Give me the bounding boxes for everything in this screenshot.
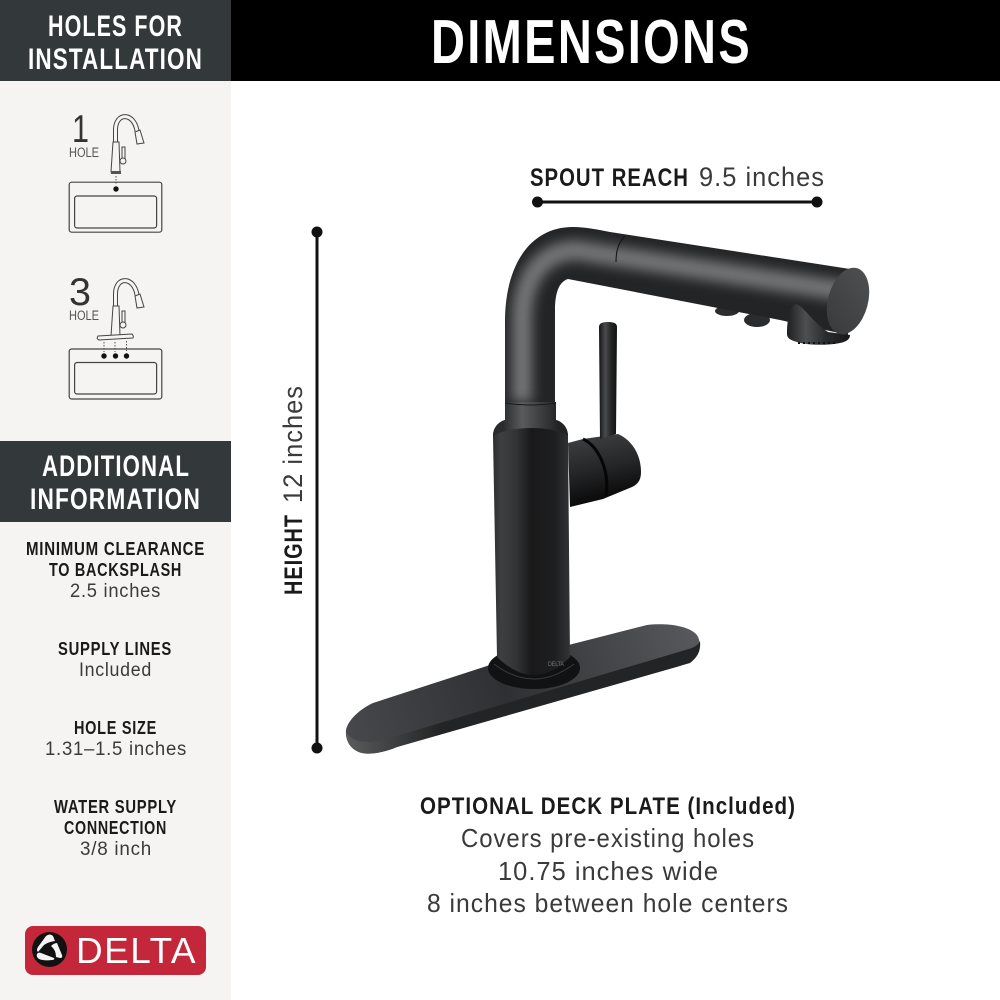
icon: one hole installation [69, 108, 162, 232]
heading: holes for installation: HOLES FOR [48, 10, 183, 43]
heading: additional information: INFORMATION [30, 483, 201, 516]
text block: supply lines: Included [79, 660, 152, 681]
faucet body and collar: DELTA [548, 662, 564, 668]
icon: three hole installation [69, 271, 162, 399]
icon: three hole installation: 3 [69, 271, 91, 314]
text block: hole size: HOLE SIZE [74, 717, 157, 738]
knobs under spout [715, 306, 770, 327]
text block: hole size [45, 717, 187, 760]
text block: optional deck plate [420, 793, 796, 918]
icon: one hole installation: 1 [72, 108, 89, 151]
text block: optional deck plate: Covers pre-existing holes [461, 823, 755, 853]
text block: water supply connection: 3/8 inch [80, 839, 152, 860]
panel: left sidebar background [0, 0, 231, 1000]
spout [505, 227, 850, 402]
text block: optional deck plate: 8 inches between hole centers [427, 888, 789, 918]
heading: holes for installation: INSTALLATION [28, 43, 203, 76]
deck plate [346, 624, 700, 754]
heading: additional information [0, 441, 231, 522]
text block: minimum clearance: MINIMUM CLEARANCE [26, 538, 205, 559]
label: height: 12 inches [278, 385, 308, 503]
text block: minimum clearance [26, 538, 205, 602]
icon: three hole installation: HOLE [69, 308, 99, 323]
logo: delta: DELTA [76, 930, 197, 971]
heading: dimensions [231, 0, 1000, 81]
label: spout reach: SPOUT REACH [530, 164, 689, 192]
faucet body and collar [493, 402, 570, 675]
text block: water supply connection: WATER SUPPLY [54, 796, 177, 817]
heading: additional information: ADDITIONAL [42, 450, 190, 483]
arrow: spout reach dimension line [532, 196, 822, 208]
arrow: height dimension line [312, 226, 322, 754]
handle hub [568, 434, 641, 507]
text block: hole size: 1.31–1.5 inches [45, 739, 187, 760]
text block: minimum clearance: 2.5 inches [70, 581, 161, 602]
logo: delta [25, 926, 206, 975]
text block: water supply connection [54, 796, 177, 860]
heading: dimensions: DIMENSIONS [431, 8, 752, 77]
text block: supply lines: SUPPLY LINES [58, 638, 172, 659]
label: spout reach [530, 162, 825, 192]
spray head nozzle [787, 304, 850, 345]
text block: minimum clearance: TO BACKSPLASH [49, 559, 182, 580]
text block: water supply connection: CONNECTION [64, 817, 167, 838]
icon: one hole installation: HOLE [69, 145, 99, 160]
label: height [278, 385, 308, 595]
illustration: black pull-out kitchen faucet with deck plate [346, 227, 876, 754]
handle lever [599, 322, 617, 439]
text block: optional deck plate: 10.75 inches wide [498, 856, 719, 886]
text block: optional deck plate: OPTIONAL DECK PLATE (Included) [420, 793, 796, 820]
text block: supply lines [58, 638, 172, 681]
heading: holes for installation [0, 0, 231, 81]
spout end cap [820, 263, 876, 339]
label: spout reach: 9.5 inches [699, 162, 825, 192]
base ring [488, 647, 580, 689]
label: height: HEIGHT [280, 514, 308, 595]
